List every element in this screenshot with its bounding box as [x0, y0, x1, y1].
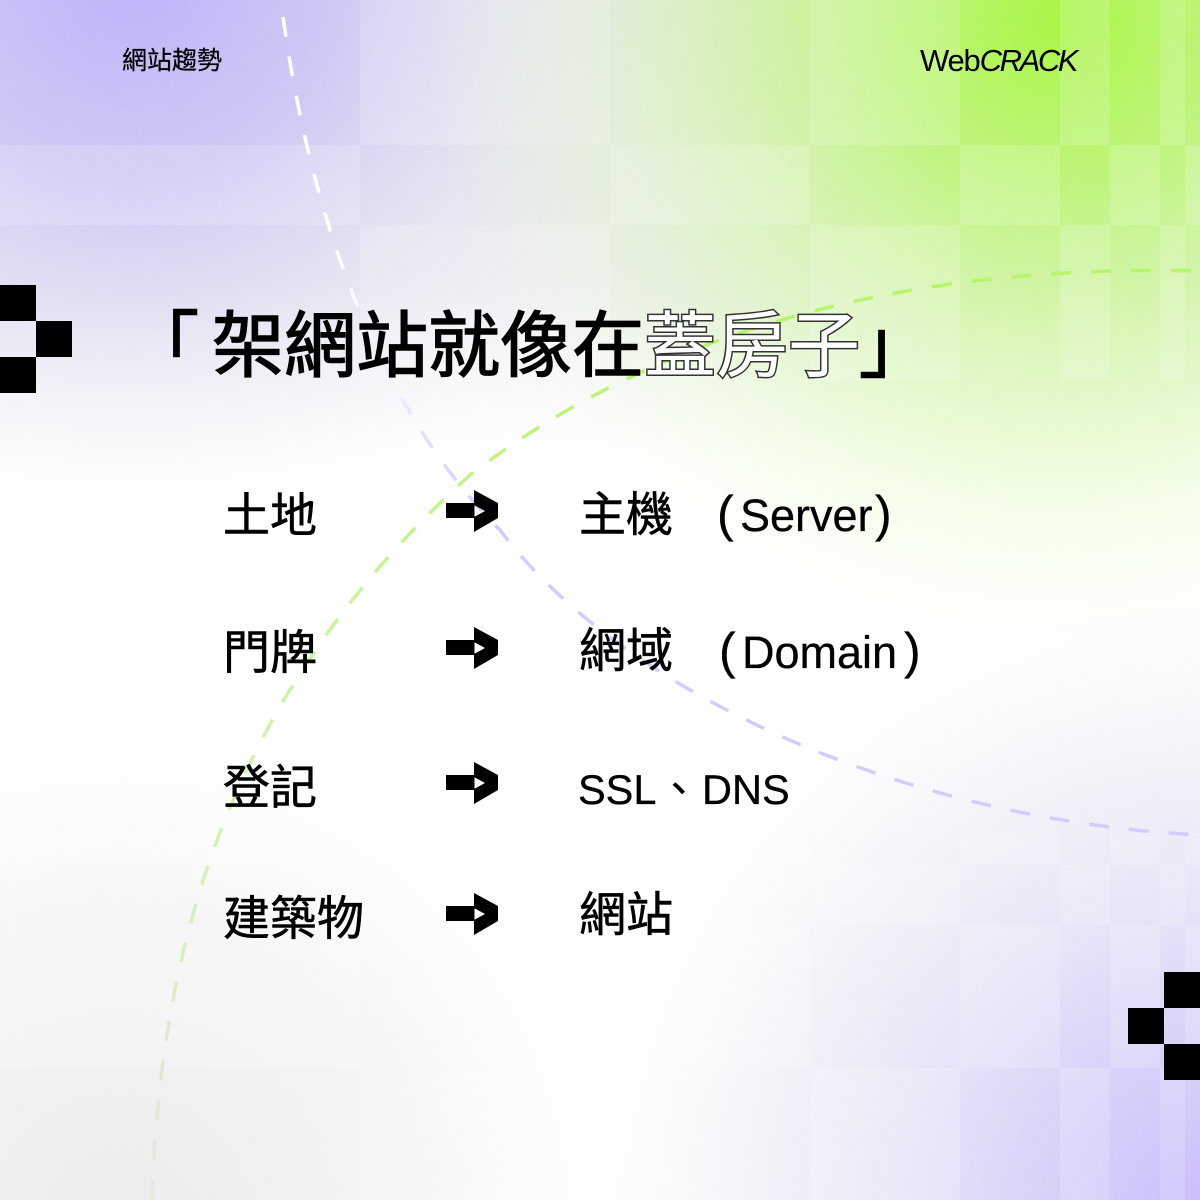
decorative pixel block: right — [1128, 972, 1200, 1080]
dashed curve: white to purple — [283, 17, 1200, 835]
arrow — [446, 627, 498, 669]
mapped term: domain: 網域 — [579, 624, 673, 677]
english: domain: ) — [904, 623, 921, 679]
title: 「 — [127, 307, 199, 387]
arrow — [446, 762, 498, 804]
english: server: Server — [740, 490, 873, 541]
mapped term: SSL DNS: SSL — [578, 766, 656, 813]
term: building: 建築物 — [223, 892, 364, 945]
row 4: building to website — [223, 888, 673, 945]
term: land: 土地 — [223, 489, 317, 542]
logo: WebCRACK: WebCRACK — [920, 43, 1080, 78]
title: 」 — [859, 307, 931, 387]
title — [127, 307, 931, 387]
english: domain: ( — [719, 623, 736, 679]
english: server: ) — [875, 486, 892, 542]
header label: 網站趨勢 — [122, 47, 222, 75]
row 3: registration to SSL DNS — [223, 761, 790, 814]
mapped term: server: 主機 — [579, 488, 673, 541]
decorative pixel block: left — [0, 285, 72, 393]
term: door plate: 門牌 — [223, 626, 317, 679]
dashed curve: green — [152, 270, 1200, 1200]
arrow — [446, 490, 498, 532]
title: 架網站就像在 — [212, 307, 644, 387]
row 2: door plate to domain — [223, 623, 921, 679]
mapped term: SSL DNS: DNS — [702, 766, 790, 813]
english: server: ( — [717, 486, 734, 542]
arrow — [446, 893, 498, 935]
term: registration: 登記 — [223, 761, 317, 814]
english: domain: Domain — [742, 627, 897, 678]
mapped term: SSL DNS: 、 — [658, 766, 700, 813]
mapped term: website: 網站 — [579, 888, 673, 941]
title: 蓋房子 — [644, 307, 860, 387]
row 1: land to server — [223, 486, 892, 542]
